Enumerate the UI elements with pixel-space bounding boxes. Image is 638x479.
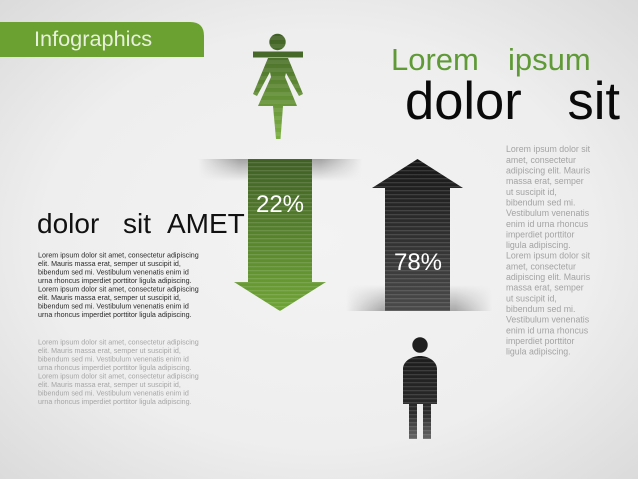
arrow: green down arrow 22%: [234, 159, 326, 311]
title: dolor sit: [405, 72, 620, 131]
text block: right column: [506, 144, 591, 357]
text block: dark paragraph: Lorem ipsum dolor sit amet, consectetur adipiscing: [38, 286, 199, 294]
arrow: green down arrow 22%: 22%: [256, 191, 304, 218]
title: Lorem ipsum: [391, 42, 591, 77]
text block: dark paragraph: elit. Mauris massa erat, semper ut suscipit id,: [38, 260, 181, 268]
text block: right column: imperdiet porttitor: [506, 229, 575, 239]
text block: light paragraph: bibendum sed mi. Vestibulum venenatis enim id: [38, 356, 189, 364]
arrow: dark up arrow 78%: [372, 159, 463, 311]
text block: right column: massa erat, semper: [506, 283, 584, 293]
title: dolor sit: sit: [568, 72, 620, 131]
text block: right column: imperdiet porttitor: [506, 336, 575, 346]
text block: right column: bibendum sed mi.: [506, 197, 575, 207]
header tab: [0, 22, 204, 57]
text block: light paragraph: urna rhoncus imperdiet porttitor ligula adipiscing.: [38, 364, 192, 372]
text block: light paragraph: urna rhoncus imperdiet porttitor ligula adipiscing.: [38, 398, 192, 406]
text block: right column: Vestibulum venenatis: [506, 208, 590, 218]
text block: dark paragraph: [38, 252, 199, 319]
icon: man figure: [403, 337, 437, 439]
text block: light paragraph: Lorem ipsum dolor sit amet, consectetur adipiscing: [38, 338, 199, 346]
text block: right column: amet, consectetur: [506, 155, 576, 165]
text block: right column: ut suscipit id,: [506, 187, 557, 197]
shadow above green arrow: [202, 159, 358, 178]
title: Lorem ipsum: ipsum: [508, 42, 591, 77]
text block: dark paragraph: urna rhoncus imperdiet porttitor ligula adipiscing.: [38, 277, 192, 285]
text block: right column: massa erat, semper: [506, 176, 584, 186]
shadow below dark arrow: [350, 288, 488, 311]
heading: dolor sit AMET: sit: [123, 208, 151, 239]
title: Lorem ipsum: Lorem: [391, 42, 479, 77]
heading: dolor sit AMET: AMET: [167, 208, 245, 239]
text block: right column: enim id urna rhoncus: [506, 325, 589, 335]
title: dolor sit: dolor: [405, 72, 522, 131]
text block: right column: amet, consectetur: [506, 261, 576, 271]
text block: light paragraph: elit. Mauris massa erat, semper ut suscipit id,: [38, 381, 181, 389]
text block: dark paragraph: urna rhoncus imperdiet porttitor ligula adipiscing.: [38, 311, 192, 319]
text block: right column: ut suscipit id,: [506, 293, 557, 303]
text block: right column: Lorem ipsum dolor sit: [506, 144, 591, 154]
text block: right column: ligula adipiscing.: [506, 347, 571, 357]
text block: dark paragraph: bibendum sed mi. Vestibulum venenatis enim id: [38, 269, 189, 277]
text block: light paragraph: elit. Mauris massa erat, semper ut suscipit id,: [38, 347, 181, 355]
text block: right column: adipiscing elit. Mauris: [506, 272, 591, 282]
text block: light paragraph: [38, 338, 199, 406]
text block: dark paragraph: elit. Mauris massa erat, semper ut suscipit id,: [38, 294, 181, 302]
heading: dolor sit AMET: dolor: [37, 208, 99, 239]
text block: light paragraph: bibendum sed mi. Vestibulum venenatis enim id: [38, 390, 189, 398]
arrow: dark up arrow 78%: 78%: [394, 249, 442, 276]
text block: dark paragraph: Lorem ipsum dolor sit amet, consectetur adipiscing: [38, 252, 199, 260]
text block: right column: Vestibulum venenatis: [506, 315, 590, 325]
heading: dolor sit AMET: [37, 208, 245, 239]
icon: woman figure: [253, 34, 303, 139]
text block: dark paragraph: bibendum sed mi. Vestibulum venenatis enim id: [38, 303, 189, 311]
text block: right column: bibendum sed mi.: [506, 304, 575, 314]
text block: right column: adipiscing elit. Mauris: [506, 166, 591, 176]
text block: right column: Lorem ipsum dolor sit: [506, 251, 591, 261]
text block: right column: enim id urna rhoncus: [506, 219, 589, 229]
text block: light paragraph: Lorem ipsum dolor sit amet, consectetur adipiscing: [38, 372, 199, 380]
header tab: Infographics: [34, 26, 152, 51]
text block: right column: ligula adipiscing.: [506, 240, 571, 250]
